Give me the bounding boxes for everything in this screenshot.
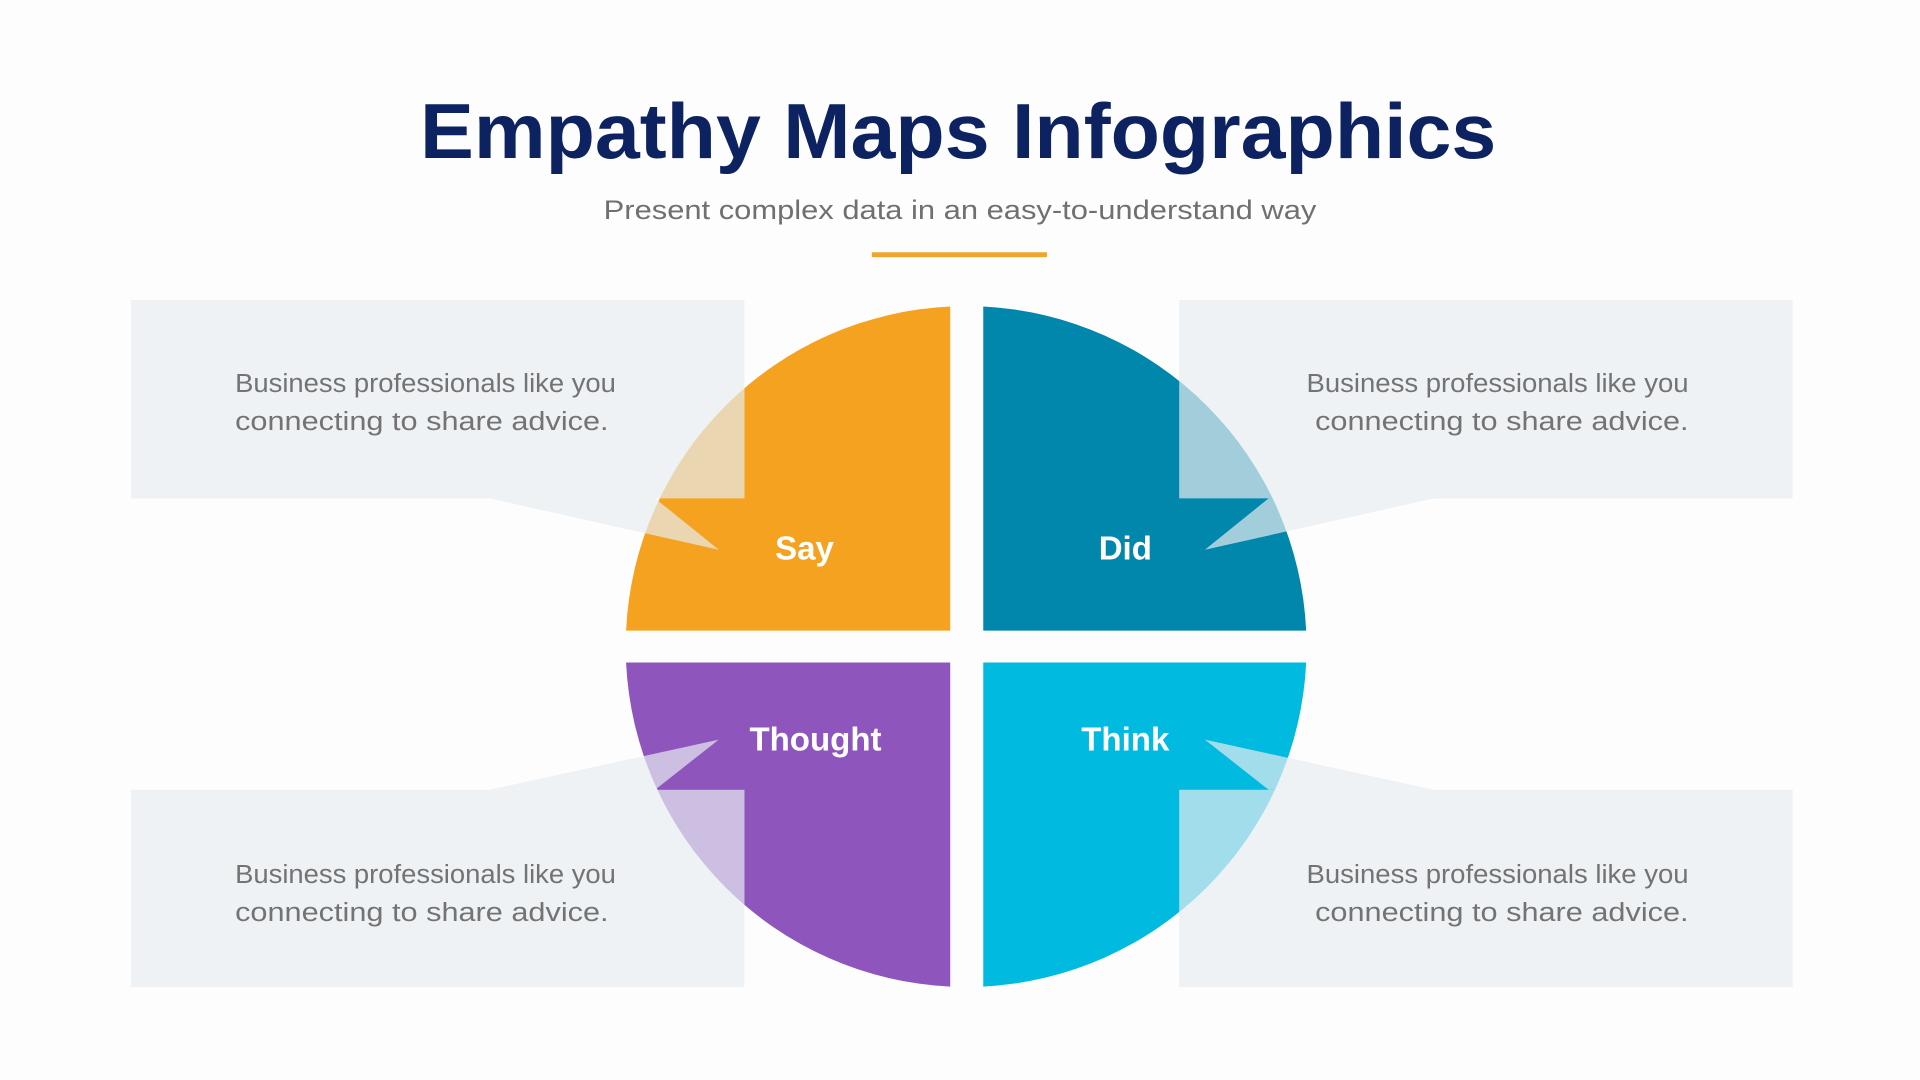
panel: did box — [1179, 300, 1793, 550]
text: did description: Business professionals like you — [1307, 370, 1689, 398]
panel: think box — [1179, 740, 1793, 987]
quadrant: thought — [626, 662, 950, 987]
quadrant: say — [626, 306, 950, 631]
quadrant: think — [983, 662, 1306, 987]
text: thought description: connecting to share advice. — [235, 899, 609, 927]
text: think description: Business professionals like you — [1307, 861, 1689, 889]
label: did: Did — [1099, 531, 1152, 568]
title: Empathy Maps Infographics — [420, 87, 1496, 175]
label: say: Say — [775, 531, 835, 568]
quadrant: did — [983, 306, 1306, 631]
accent line — [872, 252, 1047, 257]
text: say description: connecting to share advice. — [235, 408, 609, 436]
subtitle: Present complex data in an easy-to-understand way — [604, 195, 1317, 225]
panel: thought box — [131, 740, 744, 987]
text: say description: Business professionals like you — [235, 370, 616, 398]
text: thought description: Business professionals like you — [235, 861, 616, 889]
text: did description: connecting to share advice. — [1315, 408, 1689, 436]
panel: say box — [131, 300, 744, 550]
label: thought: Thought — [749, 722, 882, 759]
label: think: Think — [1081, 722, 1170, 759]
text: think description: connecting to share advice. — [1315, 899, 1689, 927]
